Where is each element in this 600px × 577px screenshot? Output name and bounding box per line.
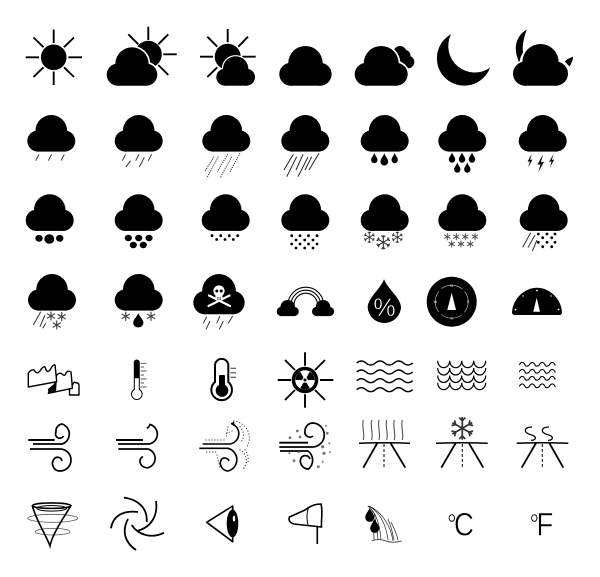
text: degrees Fahrenheit: F [537, 508, 553, 543]
icon: cloud with many rain drops [438, 115, 486, 173]
icon: cloud with sleet [115, 274, 163, 327]
icon: compass: S [451, 316, 454, 320]
icon: tornado [28, 503, 78, 546]
icon: thick thermometer [211, 359, 236, 400]
icon: cloud with small asterisk snow [438, 194, 486, 248]
icon: cloud with rain [115, 115, 163, 167]
icon: wind with snow [279, 423, 331, 469]
icon: scalloped waves [438, 361, 486, 390]
icon: compass: N [450, 284, 453, 288]
icon: rainbow with clouds [277, 287, 334, 316]
icon: hurricane [111, 498, 164, 550]
text: degrees Fahrenheit: ° [530, 508, 539, 540]
icon: cloud with rain drops [361, 115, 409, 166]
icon: crescent moon [437, 34, 490, 86]
icon: windsock [289, 504, 322, 544]
icon: choppy waves [519, 362, 555, 388]
icon: fog banners [28, 365, 79, 395]
icon: compass: E [467, 300, 470, 304]
icon: radioactive sun [278, 352, 333, 408]
icon: moon behind cloud [513, 30, 573, 86]
icon: wind with dust [199, 421, 249, 471]
icon: thin thermometer [132, 360, 146, 399]
icon: sun [26, 30, 82, 85]
icon: cloud with heavy rain [281, 115, 329, 177]
icon: sun behind large cloud [107, 27, 177, 86]
icon: cloud with dotted heavy rain [202, 115, 250, 178]
icon: wind with spirals [28, 424, 71, 471]
icon: cloud with rain and snow [28, 274, 76, 330]
icon: waterfall [365, 506, 402, 542]
icon: cloud [279, 46, 332, 86]
icon: road with heat [359, 420, 410, 468]
text: degrees Celsius: C [454, 508, 474, 543]
icon: soft waves [357, 361, 413, 392]
icon: gauge [512, 288, 562, 315]
icon: cloud with large hail [26, 194, 74, 244]
icon: toxic cloud with skull [193, 274, 245, 329]
icon: compass [427, 277, 477, 327]
icon: compass: W [434, 300, 438, 304]
icon: sun with small cloud in front [200, 29, 256, 86]
icon: humidity drop: % [373, 294, 396, 322]
icon: cloud with light rain [27, 115, 75, 161]
icon: cloud with heavy snow dots [281, 194, 329, 249]
icon: humidity drop [368, 279, 401, 323]
text: degrees Celsius: ° [447, 508, 457, 540]
icon: road with fumes [517, 427, 568, 468]
icon: cloud with rain and snow dots [520, 194, 568, 251]
icon: road with snow [436, 417, 488, 468]
icon: cloud with light snow dots [202, 194, 250, 241]
icon: eye [207, 506, 238, 542]
icon: cloud with snowflakes [361, 194, 409, 250]
icon: wind with open curls [116, 424, 157, 468]
icon: cloud with hail [115, 194, 163, 248]
icon: two clouds [355, 46, 414, 86]
icon: cloud with lightning [519, 115, 567, 172]
